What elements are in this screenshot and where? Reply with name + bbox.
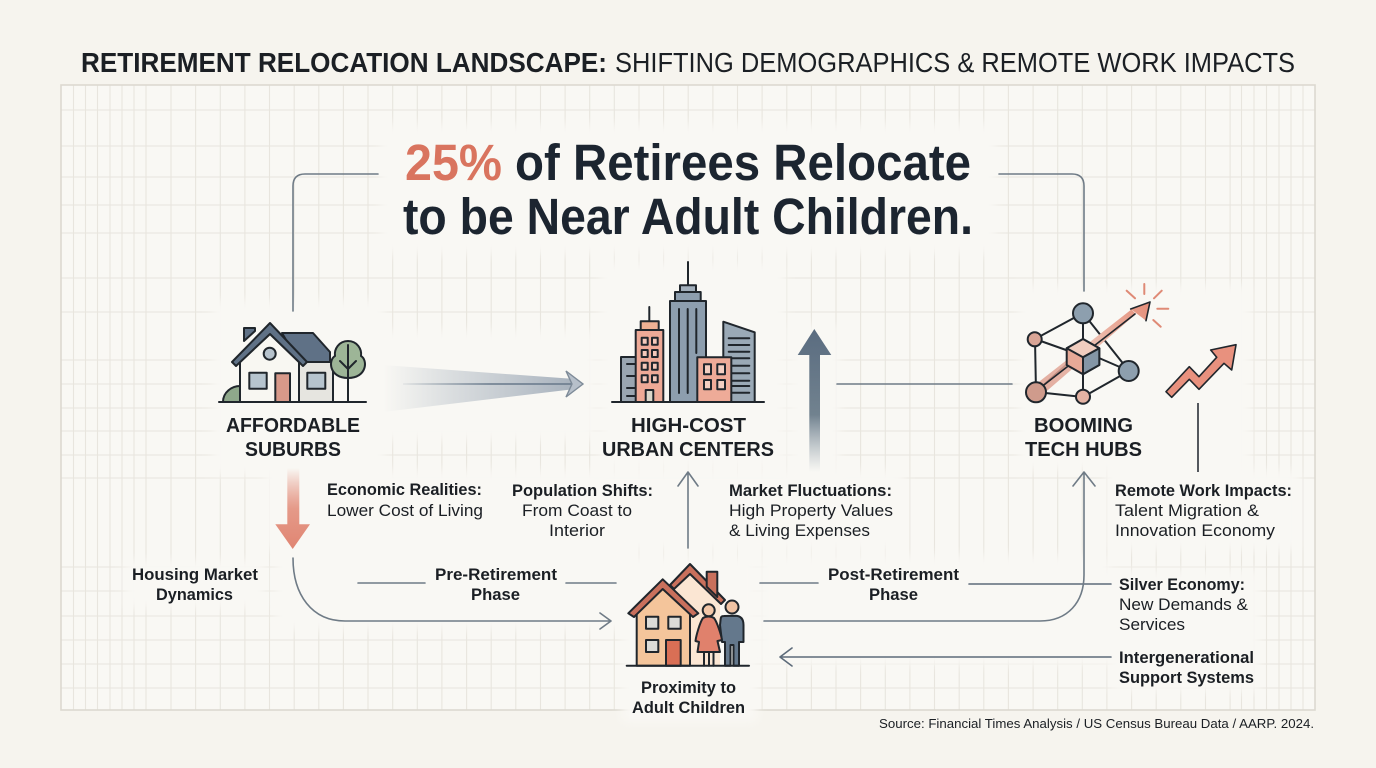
text: remote work impacts: [1115, 481, 1292, 540]
label: booming tech hubs: [1025, 415, 1142, 461]
icon: suburban house: [219, 323, 366, 402]
text: population shifts: From Coast to: [522, 501, 632, 520]
text: remote work impacts: Talent Migration &: [1115, 501, 1260, 520]
text: market fluctuations: High Property Values: [729, 501, 893, 520]
headline: 25% of retirees relocate: [403, 134, 973, 245]
arrow: proximity up to urban centers: [678, 472, 698, 548]
text: post-retirement phase: Phase: [869, 585, 918, 604]
text: remote work impacts: Remote Work Impacts:: [1115, 481, 1292, 500]
text: pre-retirement phase: [435, 565, 557, 604]
label: high-cost urban centers: HIGH-COST: [631, 415, 746, 437]
text: silver economy: Services: [1119, 615, 1185, 634]
headline: 25% of retirees relocate: of Retirees Relocate: [515, 134, 971, 191]
text: silver economy: [1119, 575, 1249, 634]
arrow: connector from headline to tech hubs: [999, 174, 1084, 291]
text: pre-retirement phase: Phase: [471, 585, 520, 604]
arrow: pre-retirement connector lines: [358, 582, 616, 584]
text: market fluctuations: & Living Expenses: [729, 521, 870, 540]
label: booming tech hubs: BOOMING: [1034, 415, 1133, 437]
text: silver economy: Silver Economy:: [1119, 575, 1245, 594]
icon: family home and couple: [627, 564, 749, 666]
text: pre-retirement phase: Pre-Retirement: [435, 565, 557, 584]
text: remote work impacts: Innovation Economy: [1115, 521, 1276, 540]
title: SHIFTING DEMOGRAPHICS & REMOTE WORK IMPACTS: [615, 47, 1295, 78]
arrow: post-retirement connector lines: [760, 583, 1111, 584]
text: intergenerational support systems: Support Systems: [1119, 668, 1254, 687]
label: high-cost urban centers: URBAN CENTERS: [602, 439, 774, 461]
text: population shifts: Interior: [549, 521, 605, 540]
label: proximity to adult children: Adult Children: [632, 698, 745, 717]
arrow: large upward market arrow: [798, 329, 831, 472]
text: intergenerational support systems: [1119, 648, 1254, 687]
text: population shifts: Population Shifts:: [512, 481, 653, 500]
label: proximity to adult children: [632, 678, 745, 717]
label: booming tech hubs: TECH HUBS: [1025, 439, 1142, 461]
text: economic realities: Lower Cost of Living: [327, 501, 483, 520]
arrow: remote work connector: [1197, 403, 1199, 472]
label: affordable suburbs: AFFORDABLE: [226, 415, 360, 437]
source note: Source: Financial Times Analysis / US Census Bureau Data / AARP. 2024.: [879, 716, 1314, 731]
icon: zigzag growth arrow: [1166, 345, 1236, 397]
text: post-retirement phase: Post-Retirement: [828, 565, 959, 584]
headline: 25% of retirees relocate: 25%: [405, 134, 502, 191]
text: economic realities: Economic Realities:: [327, 480, 482, 499]
arrow: red downward arrow: [275, 468, 310, 549]
text: market fluctuations: Market Fluctuations:: [729, 481, 892, 500]
arrow: tech hubs to urban centers line: [837, 383, 1012, 385]
arrow: connector from suburbs to headline: [293, 174, 378, 311]
text: economic realities: [327, 480, 483, 520]
panel: grid background: [61, 85, 1315, 722]
title: RETIREMENT RELOCATION LANDSCAPE:: [81, 47, 607, 78]
text: housing market dynamics: Dynamics: [156, 585, 233, 604]
arrow: proximity curve to tech hubs: [764, 472, 1095, 621]
text: post-retirement phase: [828, 565, 959, 604]
icon: city skyline: [612, 262, 764, 402]
arrow: intergenerational support to proximity: [780, 648, 1111, 666]
icon: tech network: [1026, 284, 1168, 404]
text: housing market dynamics: [132, 565, 258, 604]
text: housing market dynamics: Housing Market: [132, 565, 258, 584]
text: intergenerational support systems: Intergenerational: [1119, 648, 1254, 667]
arrow: suburbs curve to proximity: [293, 558, 611, 629]
label: affordable suburbs: [226, 415, 360, 461]
headline: 25% of retirees relocate: to be Near Adult Children.: [403, 188, 973, 245]
text: silver economy: New Demands &: [1119, 595, 1249, 614]
text: population shifts: [512, 481, 653, 540]
label: affordable suburbs: SUBURBS: [245, 439, 341, 461]
label: proximity to adult children: Proximity to: [641, 678, 736, 697]
arrow: suburbs to urban centers: [383, 365, 583, 412]
label: high-cost urban centers: [602, 415, 774, 461]
text: market fluctuations: [729, 481, 893, 540]
